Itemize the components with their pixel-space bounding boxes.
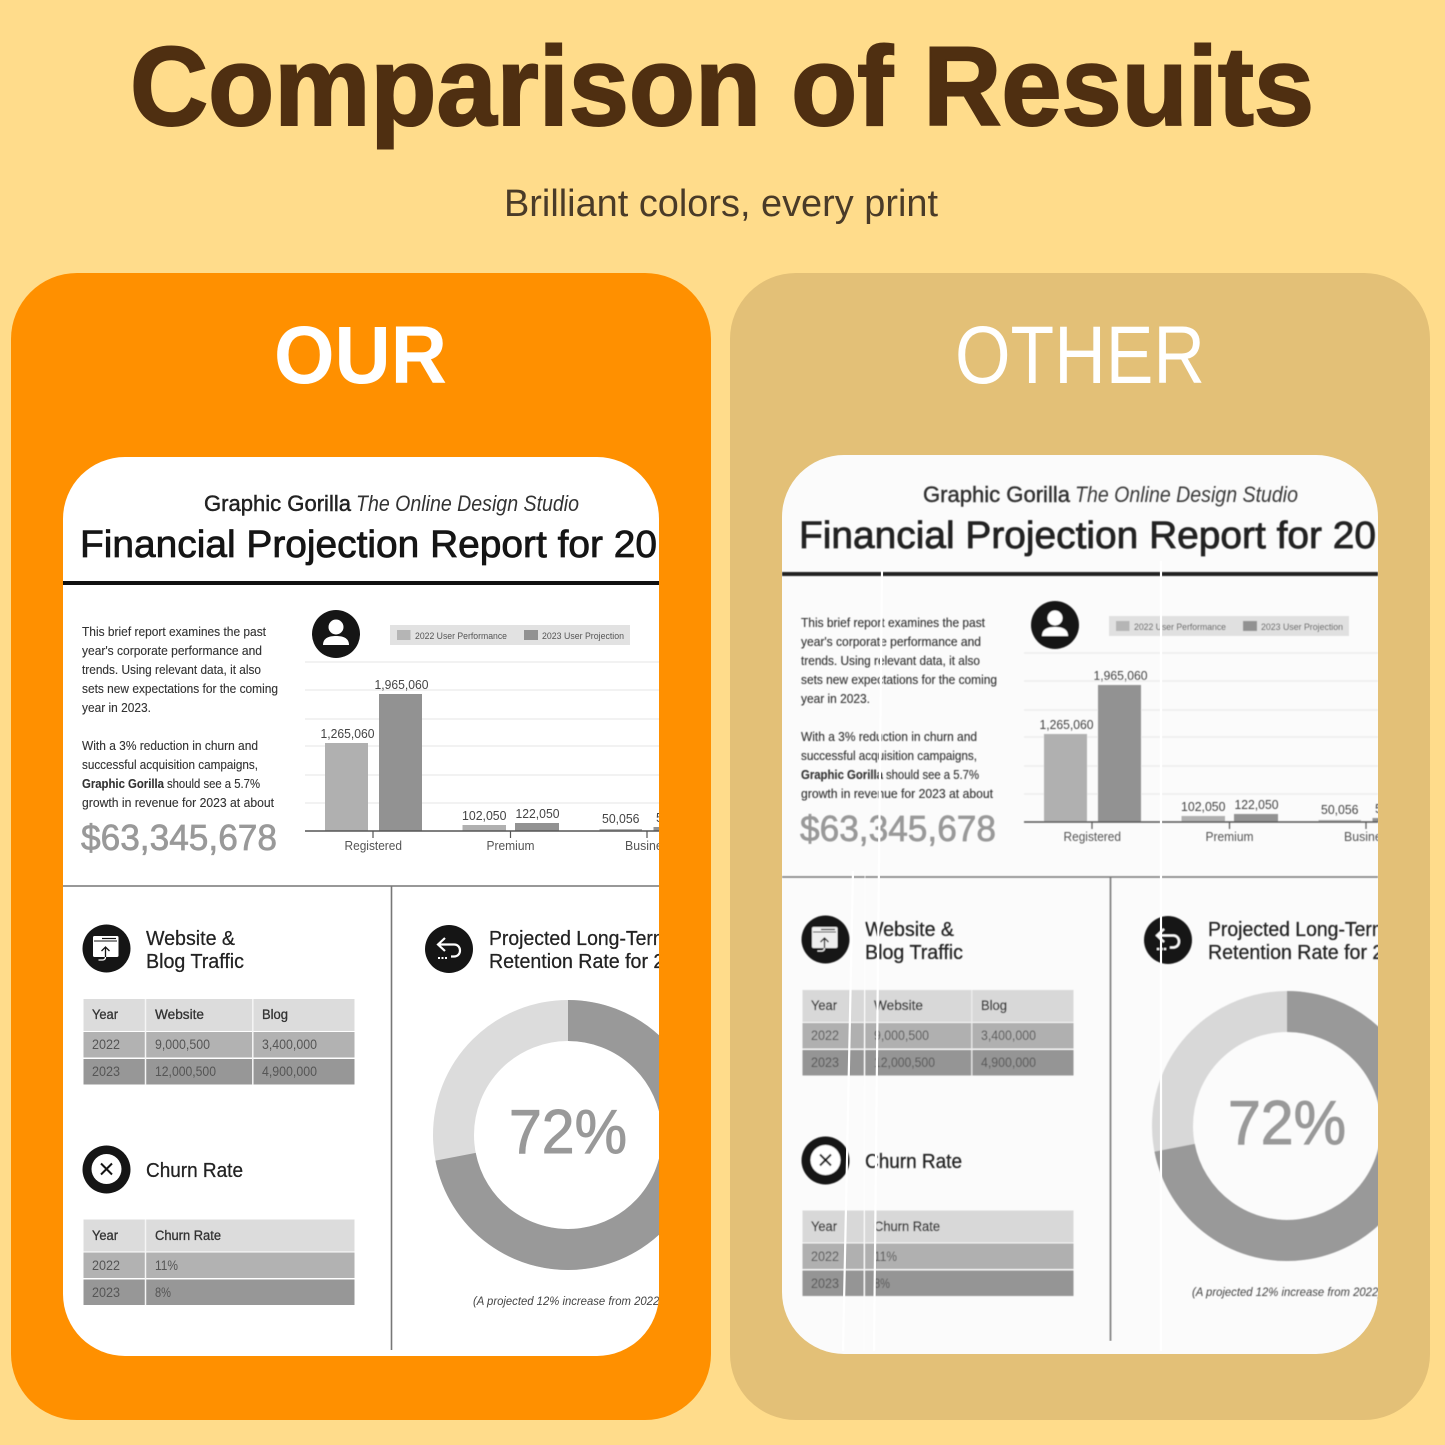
heading: website traffic: [865, 919, 963, 964]
bar chart: 50,056: [602, 811, 640, 826]
bar chart: 102,050: [1181, 799, 1226, 814]
bar chart: 1,265,060: [1040, 717, 1094, 732]
table: churn: [84, 1220, 354, 1305]
intro text: Graphic Gorilla: [801, 768, 884, 782]
bar chart: 50,056: [656, 810, 696, 825]
icon: website: [802, 916, 850, 964]
table: churn: 2022: [92, 1258, 120, 1273]
table: traffic: 2023: [92, 1064, 120, 1079]
chart legend: 2022 User Performance: [415, 631, 507, 641]
table: churn: 8%: [874, 1276, 890, 1291]
chart legend: [390, 625, 630, 645]
table: traffic: Website: [874, 998, 923, 1013]
bar chart: Registered: [1064, 829, 1121, 844]
panel: OTHER: [730, 273, 1430, 1420]
icon: website: [82, 924, 130, 972]
report brand line: Graphic Gorilla: [204, 491, 352, 516]
report brand line: [923, 482, 1298, 507]
donut chart: [1172, 1012, 1402, 1240]
bar chart: 1,965,060: [374, 677, 428, 692]
table: traffic: Year: [92, 1007, 118, 1022]
heading: website traffic: Blog Traffic: [146, 951, 244, 973]
bar chart: Business: [1344, 829, 1394, 844]
heading: retention: [490, 930, 659, 968]
intro text: year in 2023.: [82, 701, 151, 715]
bar chart: [1024, 653, 1415, 844]
heading: OUR: OUR: [274, 310, 447, 401]
report brand line: [204, 494, 578, 516]
bar chart: 1,965,060: [1094, 668, 1148, 683]
intro text: growth in revenue for 2023 at about: [801, 787, 994, 801]
heading: website traffic: Website &: [865, 919, 955, 941]
donut caption: (A projected 12% increase from 2022): [473, 1294, 663, 1308]
table: traffic: 9,000,500: [874, 1028, 929, 1043]
heading: retention: Retention Rate for 2023: [489, 951, 697, 973]
table: traffic: 2022: [811, 1028, 839, 1043]
intro text: year's corporate performance and: [82, 644, 262, 658]
heading: churn rate: Churn Rate: [865, 1151, 962, 1173]
heading: retention: Projected Long-Term: [489, 928, 669, 950]
intro text: This brief report examines the past: [801, 616, 986, 630]
bar chart: 50,056: [1375, 801, 1415, 816]
report brand line: The Online Design Studio: [356, 491, 579, 516]
bar chart: 122,050: [516, 806, 560, 821]
table: churn: 2023: [92, 1285, 120, 1300]
heading: retention: [1208, 920, 1378, 960]
bar chart: [305, 662, 696, 853]
revenue figure: $63,345,678: [800, 808, 996, 849]
icon: user: [312, 610, 360, 658]
bar chart: 1,265,060: [320, 726, 374, 741]
chart legend: 2023 User Projection: [1261, 622, 1343, 632]
heading: OTHER: OTHER: [955, 310, 1205, 401]
intro text: successful acquisition campaigns,: [82, 758, 258, 772]
intro text: should see a 5.7%: [167, 777, 260, 791]
heading: retention: Projected Long-Term: [1208, 919, 1388, 941]
table: churn: Churn Rate: [874, 1219, 940, 1234]
donut chart: [454, 1020, 683, 1250]
table: churn: Year: [92, 1228, 118, 1243]
table: traffic: 12,000,500: [874, 1055, 935, 1070]
icon: user: [1031, 601, 1079, 649]
heading: churn rate: Churn Rate: [146, 1160, 243, 1182]
table: traffic: 4,900,000: [981, 1055, 1036, 1070]
intro text: With a 3% reduction in churn and: [801, 730, 977, 744]
intro text: sets new expectations for the coming: [82, 682, 278, 696]
table: traffic: Blog: [262, 1007, 288, 1022]
intro text: successful acquisition campaigns,: [801, 749, 977, 763]
intro text: sets new expectations for the coming: [801, 673, 997, 687]
report card: other print: [782, 455, 1416, 1354]
donut value: 72%: [1228, 1089, 1346, 1158]
table: traffic: Blog: [981, 998, 1007, 1013]
icon: retention: [425, 925, 473, 973]
report card: our print: [63, 457, 697, 1356]
table: churn: 11%: [155, 1258, 178, 1273]
intro text: should see a 5.7%: [886, 768, 979, 782]
table: traffic: 12,000,500: [155, 1064, 216, 1079]
bar chart: 50,056: [1321, 802, 1358, 817]
intro text: trends. Using relevant data, it also: [82, 663, 261, 677]
table: churn: 8%: [155, 1285, 171, 1300]
report brand line: The Online Design Studio: [1075, 482, 1298, 507]
table: traffic: Website: [155, 1007, 204, 1022]
bar chart: 122,050: [1234, 797, 1278, 812]
icon: churn: [82, 1146, 130, 1194]
intro text: trends. Using relevant data, it also: [801, 654, 980, 668]
intro text: growth in revenue for 2023 at about: [82, 796, 275, 810]
table: traffic: [802, 990, 1074, 1076]
bar chart: Business: [625, 838, 675, 853]
table: traffic: Year: [811, 998, 837, 1013]
table: churn: [802, 1210, 1074, 1296]
table: traffic: 9,000,500: [155, 1037, 210, 1052]
report title: Financial Projection Report for 20: [799, 515, 1376, 557]
table: churn: 2023: [811, 1276, 839, 1291]
donut caption: (A projected 12% increase from 2022): [1192, 1285, 1382, 1299]
report brand line: Graphic Gorilla: [923, 482, 1071, 507]
heading: website traffic: Blog Traffic: [865, 942, 963, 964]
table: traffic: [84, 999, 354, 1085]
bar chart: Registered: [344, 838, 402, 853]
heading: website traffic: [146, 928, 244, 973]
donut value: 72%: [509, 1098, 627, 1167]
table: traffic: 2022: [92, 1037, 120, 1052]
subtitle: Brilliant colors, every print: [504, 183, 938, 225]
intro text: Graphic Gorilla: [82, 777, 165, 791]
heading: website traffic: Website &: [146, 928, 236, 950]
table: churn: 2022: [811, 1249, 839, 1264]
icon: churn: [802, 1136, 850, 1184]
table: traffic: 3,400,000: [262, 1037, 317, 1052]
table: traffic: 2023: [811, 1055, 839, 1070]
intro text: year's corporate performance and: [801, 635, 981, 649]
chart legend: [1109, 616, 1349, 636]
icon: retention: [1144, 916, 1192, 964]
bar chart: 102,050: [462, 808, 506, 823]
chart legend: 2023 User Projection: [542, 631, 624, 641]
intro text: This brief report examines the past: [82, 625, 267, 639]
bar chart: Premium: [486, 838, 534, 853]
intro text: With a 3% reduction in churn and: [82, 739, 258, 753]
panel: OUR: [11, 273, 711, 1420]
intro text: year in 2023.: [801, 692, 870, 706]
bar chart: Premium: [1206, 829, 1254, 844]
report title: Financial Projection Report for 20: [80, 524, 657, 566]
table: churn: Year: [811, 1219, 837, 1234]
chart legend: 2022 User Performance: [1134, 622, 1226, 632]
title: Comparison of Resuits: [130, 24, 1314, 149]
table: churn: 11%: [874, 1249, 897, 1264]
revenue figure: $63,345,678: [81, 817, 277, 858]
table: traffic: 3,400,000: [981, 1028, 1036, 1043]
table: traffic: 4,900,000: [262, 1064, 317, 1079]
intro text: [82, 625, 278, 810]
heading: retention: Retention Rate for 2023: [1208, 942, 1416, 964]
intro text: [801, 616, 997, 801]
table: churn: Churn Rate: [155, 1228, 221, 1243]
